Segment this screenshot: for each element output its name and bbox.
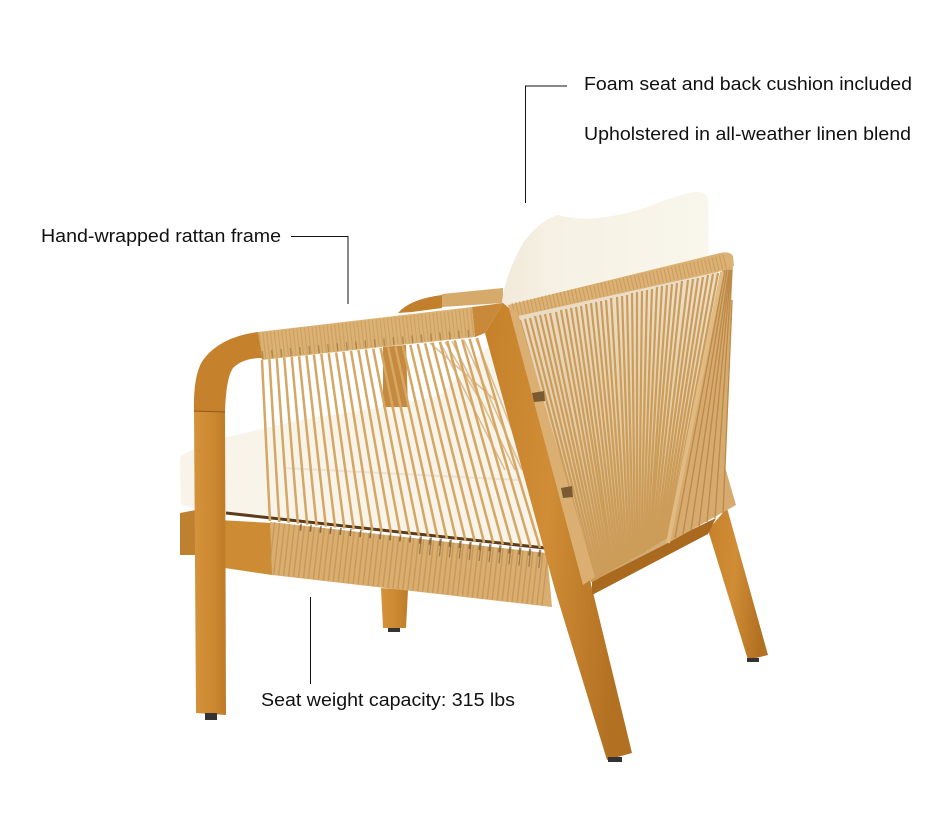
- leader line: cushion: [526, 86, 567, 203]
- back panel top band: [508, 252, 734, 316]
- shadow beneath cushion: [226, 513, 545, 548]
- rail under back panel: [592, 518, 716, 595]
- chair illustration: [180, 192, 768, 762]
- back panel backing: [518, 272, 718, 580]
- front leg diagonal post: [485, 303, 632, 762]
- arm rattan band: [258, 307, 475, 360]
- label: foam cushion: Foam seat and back cushion included: [584, 73, 912, 94]
- rear right leg: [708, 508, 768, 662]
- arm corner joint: [472, 303, 503, 337]
- label: weight capacity: Seat weight capacity: 315 lbs: [261, 689, 515, 710]
- seat cushion: [180, 345, 545, 548]
- lower rattan band: [270, 522, 552, 607]
- arm panel rattan strings: [262, 338, 540, 548]
- label: upholstery: Upholstered in all-weather linen blend: [584, 123, 911, 144]
- back support block: [383, 345, 408, 407]
- back panel edge strip: [508, 305, 595, 585]
- back cushion: [502, 192, 709, 330]
- front seat rail: [218, 520, 272, 575]
- dark wrap notches: [300, 527, 547, 554]
- rear left leg: [381, 588, 408, 632]
- front post and curved arm: [194, 332, 262, 720]
- leader line: rattan frame: [291, 236, 348, 304]
- diagonal strap: [668, 272, 722, 543]
- bracket hardware: [532, 391, 573, 498]
- back panel: [508, 252, 736, 585]
- far side strings: [430, 339, 528, 470]
- seat rail stub: [180, 510, 196, 555]
- back panel strings: [520, 273, 718, 582]
- label: rattan frame: Hand-wrapped rattan frame: [41, 225, 281, 246]
- leader line: seat capacity: [310, 597, 312, 684]
- far arm of chair: [398, 288, 503, 313]
- right wedge of strings: [668, 262, 736, 543]
